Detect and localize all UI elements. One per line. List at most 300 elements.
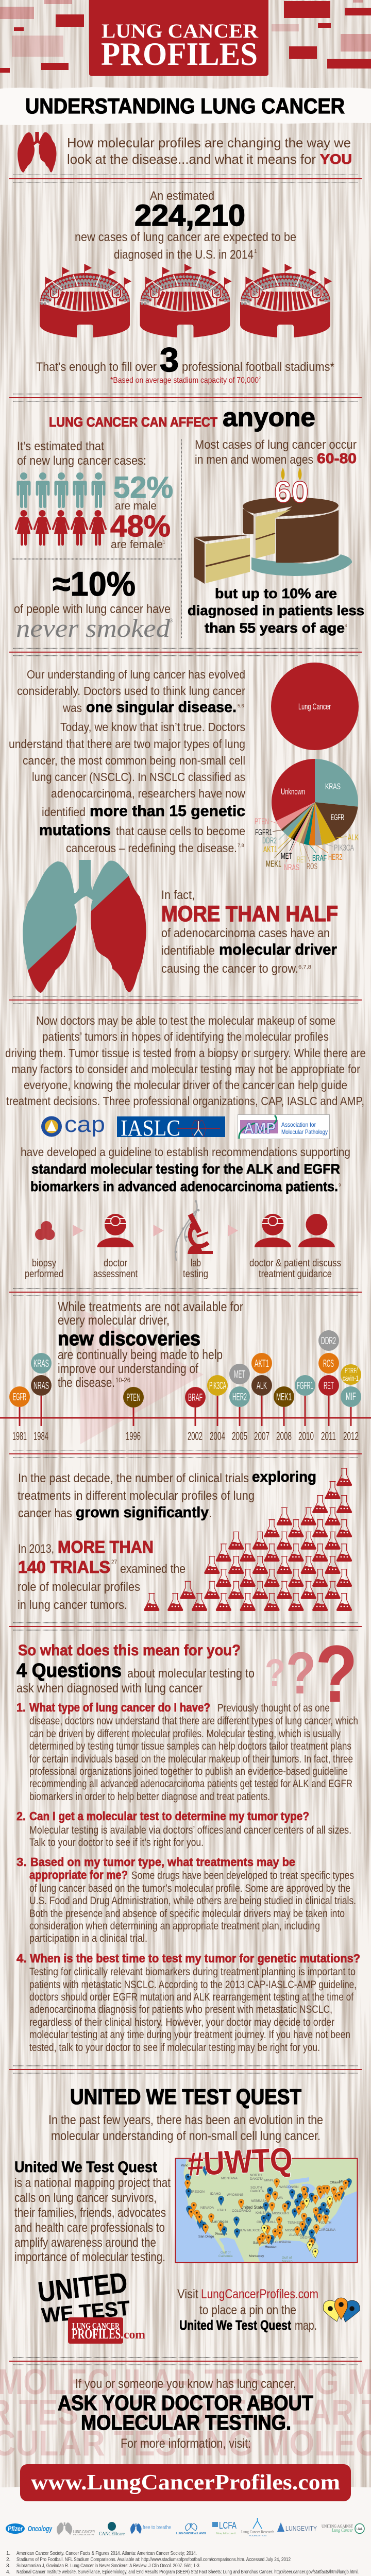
panel: gender split: of new lung cancer cases: (17, 454, 146, 468)
stadium caption (36, 341, 334, 385)
question 4: When is the best time to test my tumor for genetic mutations? (30, 1952, 360, 1965)
panel: never smoked: of people with lung cancer have (14, 602, 171, 616)
logo: CancerCare: CANCERcare (99, 2531, 125, 2536)
map with pins: Vanc (181, 2164, 189, 2167)
background text: molecular testing (0, 2362, 371, 2463)
text block: our understanding: understand that there are two major types of lung (9, 737, 245, 751)
heading: united we test quest: In the past few years, there has been an evolution in the (48, 2113, 323, 2127)
text block: guideline: 9 (339, 1183, 341, 1188)
panel: never smoked: 3 (170, 618, 173, 624)
question 1: biomarkers in order to help better diagnose and treat patients. (29, 1791, 270, 1803)
icons: men (16, 472, 105, 508)
chart: pie of molecular drivers: PIK3CA (334, 843, 354, 853)
call to action: visit to place a pin: LungCancerProfiles.com (201, 2287, 318, 2301)
map with pins: WISCONSIN (279, 2185, 299, 2189)
map with pins: SOUTH (250, 2186, 262, 2190)
heading: four questions: 4 Questions (16, 1660, 122, 1682)
intro text: look at the disease...and what it means for (67, 151, 316, 167)
icon: doctor (97, 1214, 134, 1247)
references: Subramanian J, Govindan R. Lung Cancer in Never Smokers: A Review. J Clin Oncol. 2007. 561; 1-3. (16, 2563, 200, 2569)
text block: quest description: their families, friends, advocates (14, 2206, 166, 2220)
timeline of discoveries: 2012 (343, 1430, 359, 1443)
text block: quest description: and health care professionals to (14, 2221, 165, 2235)
panel: gender split: are female (111, 538, 163, 551)
title banner: PROFILES (101, 36, 258, 72)
call to action: ask your doctor: For more information, visit: (121, 2436, 251, 2451)
panel: gender split: It’s estimated that (17, 439, 104, 453)
map with pins: MISSISSIPPI (285, 2229, 305, 2232)
timeline of discoveries: ALK (257, 1380, 267, 1392)
question 3: consideration when determining an appropriate treatment plan, including (29, 1920, 320, 1932)
text block: our understanding: was (62, 701, 82, 715)
statistic: new cases: new cases of lung cancer are expected to be (75, 230, 296, 244)
question 3: 3. (16, 1855, 27, 1869)
step labels: doctor (104, 1258, 127, 1269)
text block: clinical trials: In 2013, (18, 1542, 54, 1556)
statistic: new cases: 1 (254, 249, 257, 255)
heading: four questions: about molecular testing to (127, 1667, 255, 1681)
question 3: appropriate for me? (29, 1868, 128, 1882)
question 1: What type of lung cancer do I have? (29, 1701, 210, 1714)
text block: clinical trials (18, 1469, 316, 1612)
text block: clinical trials: 27 (111, 1558, 117, 1566)
call to action: visit to place a pin (177, 2287, 318, 2333)
logo: LCFA: LCFA (219, 2520, 237, 2531)
statistic: new cases (75, 189, 296, 262)
chart: pie of molecular drivers: RET (297, 855, 307, 865)
map with pins: WYOMING (227, 2193, 243, 2197)
question 4: 4. (16, 1952, 27, 1965)
icons: women (15, 510, 107, 546)
logo: LUNGevity (277, 2522, 317, 2532)
text block: testing explanation: Now doctors may be able to test the molecular makeup of some (36, 1014, 335, 1027)
chart: pie of molecular drivers: FGFR1 (255, 827, 272, 837)
question 3: participation in a clinical trial. (29, 1933, 147, 1944)
step labels: testing (183, 1268, 208, 1280)
statistic: new cases: diagnosed in the U.S. in 2014 (114, 248, 254, 262)
map with pins (175, 2140, 358, 2263)
map with pins: DAKOTA (250, 2190, 264, 2193)
timeline of discoveries: 2011 (321, 1430, 336, 1443)
text block: new discoveries (58, 1299, 243, 1390)
intro text: YOU (320, 151, 352, 167)
heading: lung cancer can affect anyone: anyone (223, 403, 315, 432)
timeline of discoveries: MIF (346, 1391, 356, 1402)
button: website (20, 2464, 351, 2501)
text block: new discoveries: While treatments are not available for (58, 1299, 243, 1314)
logo: lung cancer foundation (57, 2522, 95, 2536)
panel: never smoked: ≈10% (53, 565, 136, 603)
map with pins: Gulf of (221, 2251, 230, 2255)
sponsor logos (6, 2518, 364, 2537)
text block: our understanding: Our understanding of lung cancer has evolved (27, 668, 245, 681)
heading band: understanding lung cancer (0, 87, 371, 125)
text block: guideline (21, 1145, 350, 1194)
icon: question marks: ? (265, 1651, 285, 1695)
call to action: ask your doctor (58, 2377, 313, 2451)
references (6, 2551, 364, 2576)
timeline of discoveries: ROS (323, 1358, 334, 1369)
question 4: tested, talk to your doctor to see if molecular testing may be right for you. (29, 2042, 320, 2054)
timeline of discoveries: BRAF (188, 1392, 203, 1403)
text block: our understanding: lung cancer (NSCLC). In NSCLC classified as (32, 770, 245, 784)
logo: IASLC: IASLC (121, 1115, 180, 1141)
timeline of discoveries: MEK1 (276, 1392, 292, 1403)
hashtag: #UWTQ (187, 2140, 293, 2183)
logo: Pfizer Oncology (6, 2523, 52, 2534)
logo: lung cancer foundation: FOUNDATION (73, 2533, 94, 2536)
map with pins: California (218, 2255, 233, 2258)
map with pins: MISSOURI (272, 2212, 289, 2215)
map with pins: ALABAMA (289, 2233, 305, 2237)
statistic: new cases: An estimated (150, 189, 214, 203)
map with pins: Las Vegas (212, 2220, 228, 2224)
map with pins: San Antonio (253, 2241, 271, 2245)
callout: more than half: causing the cancer to grow. (161, 962, 298, 976)
chart: pie of molecular drivers: PTEN (255, 817, 269, 826)
timeline of discoveries: 2008 (276, 1430, 292, 1443)
map with pins: GEORGIA (300, 2236, 316, 2240)
icon: large split lungs (23, 860, 146, 993)
timeline of discoveries: RET (324, 1380, 334, 1392)
question 3 (16, 1855, 356, 1944)
panel: age range with cake: than 55 years of age (205, 620, 345, 636)
panel: age range with cake: 4 (345, 623, 347, 628)
timeline of discoveries: 2010 (298, 1430, 314, 1443)
map with pins: OKLAHOMA (257, 2221, 276, 2224)
process flow: testing steps (25, 1200, 341, 1280)
map with pins: Houston (265, 2245, 278, 2249)
timeline of discoveries: MET (234, 1369, 245, 1380)
map with pins: MONTANA (221, 2177, 238, 2180)
logo: united we test: LUNG CANCER (72, 2321, 120, 2331)
text block: testing explanation: patients’ tumors in hopes of identifying the molecular profiles (42, 1030, 329, 1043)
heading: four questions (16, 1642, 255, 1696)
logo: united we test: PROFILES. (72, 2326, 123, 2342)
text block: new discoveries: every molecular driver, (58, 1312, 170, 1328)
text block: our understanding: cancer, the most common being non-small cell (23, 754, 245, 767)
text block: clinical trials: . (209, 1506, 212, 1520)
text block: our understanding: 7,8 (238, 843, 244, 848)
question 2: Talk to your doctor to see if it’s right for you. (29, 1837, 204, 1849)
map with pins: Gulf of (282, 2256, 292, 2260)
text block: testing explanation (5, 1014, 366, 1108)
chart: pie of molecular drivers: AKT1 (263, 844, 277, 854)
text block: clinical trials: 140 TRIALS (18, 1557, 110, 1577)
timeline of discoveries: KRAS (33, 1358, 49, 1369)
timeline of discoveries: PTRF/ (345, 1366, 358, 1375)
text block: quest description (14, 2159, 171, 2264)
chart: pie of molecular drivers: DDR2 (262, 836, 277, 845)
logo: IASLC (117, 1115, 225, 1141)
button: website: www.LungCancerProfiles.com (31, 2471, 340, 2495)
callout: more than half: molecular driver (219, 941, 337, 958)
map with pins: United States (241, 2205, 265, 2210)
map with pins: Phoenix (215, 2232, 227, 2236)
text block: clinical trials: exploring (252, 1469, 316, 1485)
callout: more than half (161, 888, 338, 976)
timeline of discoveries: NRAS (33, 1380, 49, 1392)
timeline of discoveries: DDR2 (321, 1335, 336, 1347)
timeline of discoveries: FGFR1 (297, 1380, 313, 1392)
heading: united we test quest (48, 2084, 323, 2143)
panel: age range with cake (188, 438, 364, 636)
text block: clinical trials: role of molecular profiles (18, 1580, 140, 1594)
map with pins: NORTH (319, 2221, 331, 2225)
timeline of discoveries: PIK3CA (209, 1380, 226, 1392)
icon: question marks (265, 1629, 358, 1719)
panel: never smoked: never smoked (16, 614, 171, 642)
icon: lungs (18, 132, 56, 173)
panel: gender split: 1 (163, 540, 165, 545)
timeline of discoveries: HER2 (232, 1392, 247, 1403)
text block: quest description: importance of molecular testing. (14, 2250, 165, 2264)
icon: question marks: ? (286, 1640, 316, 1706)
map with pins: NEW MEXICO (239, 2229, 261, 2232)
icon: biopsy (35, 1221, 55, 1240)
text block: our understanding: identified (42, 805, 86, 819)
heading: united we test quest: UNITED WE TEST QUEST (70, 2084, 301, 2109)
text block: quest description: calls on lung cancer survivors, (14, 2191, 157, 2205)
panel: never smoked (14, 565, 173, 642)
logo: united we test (36, 2266, 145, 2344)
map with pins: NEBRASKA (251, 2199, 269, 2203)
logo: united we test: WE TEST (41, 2297, 131, 2327)
timeline of discoveries: 1984 (33, 1430, 48, 1443)
map with pins: OREGON (190, 2190, 205, 2194)
panel: gender split (15, 439, 173, 551)
text block: clinical trials: in lung cancer tumors. (18, 1598, 127, 1612)
chart: pie of molecular drivers: EGFR (331, 812, 344, 822)
arrows (73, 1225, 238, 1236)
panel: gender split: 52% (113, 471, 173, 504)
logo: LCFA (212, 2520, 237, 2535)
intro text: How molecular profiles are changing the way we (67, 135, 351, 150)
chart: pie of molecular drivers: ALK (348, 833, 359, 842)
references: 2. (6, 2557, 10, 2563)
panel: age range with cake: 60-80 (317, 450, 357, 466)
logo: AMP (238, 1115, 330, 1139)
panel: age range with cake: Most cases of lung cancer occur (195, 438, 357, 452)
logo: Pfizer Oncology: Pfizer (8, 2524, 23, 2533)
timeline of discoveries (0, 1330, 371, 1443)
logo: lung cancer research foundation: FOUNDATION (249, 2534, 266, 2537)
timeline arrow backdrop (80, 1309, 204, 1444)
call to action: visit to place a pin: Visit (177, 2287, 198, 2301)
text block: our understanding: considerably. Doctors used to think lung cancer (17, 684, 245, 698)
logo: uniting against lung cancer (322, 2523, 364, 2534)
callout: more than half: MORE THAN HALF (161, 902, 338, 926)
logo: uniting against lung cancer: Lung Cancer (331, 2528, 353, 2533)
text block: our understanding: one singular disease. (86, 699, 237, 716)
stadium caption: 2 (259, 377, 261, 380)
question 1: 1. (16, 1701, 26, 1714)
stadium caption: *Based on average stadium capacity of 70,000 (110, 376, 259, 385)
map with pins: IDAHO (210, 2192, 221, 2196)
map with pins: MINN. (264, 2179, 274, 2182)
logo: lung cancer alliance: LUNG CANCER ALLIANCE (176, 2532, 207, 2535)
text block: clinical trials: MORE THAN (58, 1537, 154, 1556)
question 2 (16, 1809, 351, 1849)
statistic: new cases: 224,210 (134, 199, 245, 232)
title banner (89, 0, 268, 76)
call to action: visit to place a pin: map. (295, 2318, 317, 2333)
text block: clinical trials: cancer has (18, 1506, 72, 1520)
step labels: biopsy (32, 1258, 56, 1269)
logo: uniting against lung cancer: UNITING AGAINST (322, 2524, 353, 2529)
question 1 (16, 1701, 358, 1803)
chart: lung cancer circle: Lung Cancer (298, 702, 331, 711)
text block: new discoveries: 10-26 (115, 1376, 130, 1384)
pictogram: flasks (144, 1468, 352, 1611)
callout: more than half: identifiable (161, 944, 215, 958)
text block: clinical trials: treatments in different molecular profiles of lung (18, 1489, 255, 1503)
text block: new discoveries: improve our understanding of (58, 1361, 199, 1376)
timeline of discoveries: 2004 (210, 1430, 225, 1443)
map with pins: Mexico (282, 2260, 293, 2263)
chart: pie of molecular drivers: MEK1 (266, 859, 281, 869)
chart: lung cancer circle (271, 663, 359, 750)
text block: our understanding: 5,6 (238, 703, 244, 708)
call to action: ask your doctor: ASK YOUR DOCTOR ABOUT (58, 2391, 313, 2415)
icon row: three stadiums (40, 264, 331, 337)
panel: gender split: 48% (110, 510, 171, 543)
logo: AMP: Association for (281, 1121, 316, 1128)
timeline of discoveries: EGFR (13, 1392, 26, 1403)
callout: more than half: 6,7,8 (298, 964, 311, 970)
step labels (25, 1258, 341, 1280)
question 2: Can I get a molecular test to determine my tumor type? (29, 1809, 309, 1823)
text block: our understanding: more than 15 genetic (90, 803, 245, 820)
map with pins: DAKOTA (250, 2177, 264, 2181)
text block: quest description: amplify awareness around the (14, 2235, 156, 2250)
text block: quest description: United We Test Quest (14, 2159, 157, 2176)
logo: lung cancer research foundation: Lung Cancer Research (241, 2530, 274, 2534)
references: Stadiums of Pro Football. NFL Stadium Comparisons. Available at: http://www.stadiumsofprofootball.com/comparisons.htm. Accessed July 24, 2012 (16, 2557, 291, 2563)
text block: clinical trials: In the past decade, the number of clinical trials (18, 1471, 249, 1485)
heading: four questions: ask when diagnosed with lung cancer (16, 1681, 203, 1696)
map with pins: Ottawa (330, 2181, 341, 2184)
logo: uniting against lung cancer: UAL (357, 2528, 363, 2531)
map with pins: CAROLINA (318, 2228, 336, 2232)
title banner: LUNG CANCER (102, 20, 259, 42)
step labels: doctor & patient discuss (249, 1258, 341, 1269)
icon: microscope and DNA (174, 1200, 213, 1261)
references: American Cancer Society. Cancer Facts & Figures 2014. Atlanta: American Cancer Society; 2014. (16, 2551, 197, 2556)
icon: doctor and patient (255, 1214, 335, 1247)
map with pins: San Diego (198, 2235, 214, 2239)
stadium caption: 3 (160, 341, 179, 379)
logo: free to breathe (130, 2523, 171, 2534)
logo: free to breathe: free to breathe (143, 2524, 171, 2531)
text block: new discoveries: new discoveries (58, 1328, 200, 1350)
panel: gender split: are male (115, 499, 157, 512)
text block: our understanding: that cause cells to become (116, 824, 245, 838)
map with pins: COLORADO (232, 2209, 251, 2213)
chart: pie of molecular drivers (255, 759, 359, 872)
chart: pie of molecular drivers: NRAS (284, 862, 299, 872)
logo: Pfizer Oncology: Oncology (28, 2524, 52, 2533)
heading band: understanding lung cancer: UNDERSTANDING LUNG CANCER (25, 94, 345, 118)
text block: our understanding: Today, we know that isn’t true. Doctors (60, 720, 245, 734)
call to action: ask your doctor: MOLECULAR TESTING. (81, 2411, 291, 2434)
map with pins: LOUISIANA (273, 2241, 291, 2244)
logo: lung cancer research foundation (241, 2518, 274, 2537)
timeline of discoveries: 2002 (188, 1430, 203, 1443)
logo: united we test: UNITED (36, 2266, 129, 2308)
step labels: assessment (93, 1268, 138, 1280)
text block: our understanding: adenocarcinoma, researchers have now (51, 787, 245, 800)
chart: pie of molecular drivers: MET (281, 851, 292, 861)
text block: clinical trials: examined the (120, 1562, 185, 1576)
callout: more than half: of adenocarcinoma cases have an (161, 926, 330, 940)
timeline of discoveries: 2005 (232, 1430, 247, 1443)
step labels: lab (191, 1258, 201, 1269)
text block: new discoveries: are continually being made to help (58, 1347, 223, 1362)
logo: lung cancer alliance (176, 2523, 207, 2535)
question 4 (16, 1952, 360, 2054)
icon: birthday cake: 60 (274, 476, 309, 509)
map with pins: IOWA (274, 2196, 283, 2200)
map with pins: NEVADA (200, 2206, 214, 2210)
call to action: ask your doctor: If you or someone you know has lung cancer, (75, 2377, 296, 2391)
text block: our understanding: cancerous – redefining the disease. (66, 841, 237, 855)
heading: lung cancer can affect anyone: LUNG CANCER CAN AFFECT (49, 414, 217, 430)
text block: our understanding (9, 668, 245, 855)
logo: united we test: com (124, 2328, 145, 2342)
panel: age range with cake: diagnosed in patients less (188, 603, 364, 618)
call to action: visit to place a pin: United We Test Quest (179, 2317, 291, 2333)
heading: united we test quest: molecular understanding of non-small cell lung cancer. (51, 2129, 321, 2143)
heading: lung cancer can affect anyone (49, 403, 315, 432)
logo: LCFA: Now, let's cure it. (216, 2532, 237, 2535)
chart: pie of molecular drivers: Unknown (281, 787, 305, 796)
icon: birthday cake (194, 469, 352, 584)
decorative red blocks (0, 0, 371, 73)
question 3: Based on my tumor type, what treatments may be (30, 1855, 295, 1869)
logo: AMP: Molecular Pathology (281, 1128, 328, 1136)
logo: lung cancer foundation: LUNG CANCER (73, 2530, 95, 2534)
text block: our understanding: mutations (39, 822, 111, 839)
timeline of discoveries: 2007 (254, 1430, 269, 1443)
white footer background (0, 2486, 371, 2576)
step labels: performed (25, 1268, 63, 1280)
text block: new discoveries: the disease. (58, 1375, 115, 1390)
references: 3. (6, 2563, 10, 2569)
timeline of discoveries: cavin-1 (343, 1374, 359, 1383)
stadium caption: That’s enough to fill over (36, 360, 157, 374)
text block: guideline: biomarkers in advanced adenocarcinoma patients. (30, 1179, 338, 1194)
map with pins: Mont (339, 2180, 347, 2183)
question 2: 2. (16, 1809, 26, 1823)
text block: guideline: standard molecular testing for the ALK and EGFR (31, 1161, 340, 1177)
chart: pie of molecular drivers: ROS (307, 861, 317, 871)
timeline of discoveries: 1981 (12, 1430, 27, 1443)
logo: CAP (41, 1112, 105, 1137)
logo: CancerCare (99, 2522, 125, 2536)
references: 4. (6, 2569, 10, 2575)
question 1: Previously thought of as one (217, 1702, 330, 1714)
map with pins: NORTH (250, 2174, 262, 2177)
logo: CAP: cap (64, 1112, 105, 1137)
map with pins: Monterrey (249, 2255, 264, 2258)
icon: three map pins (323, 2298, 360, 2322)
step labels: treatment guidance (259, 1268, 332, 1280)
stadium caption: professional football stadiums* (182, 360, 334, 374)
map with pins: TENNESSEE (288, 2221, 308, 2225)
text block: quest description: is a national mapping project that (14, 2176, 171, 2190)
chart: pie of molecular drivers: HER2 (328, 852, 342, 862)
